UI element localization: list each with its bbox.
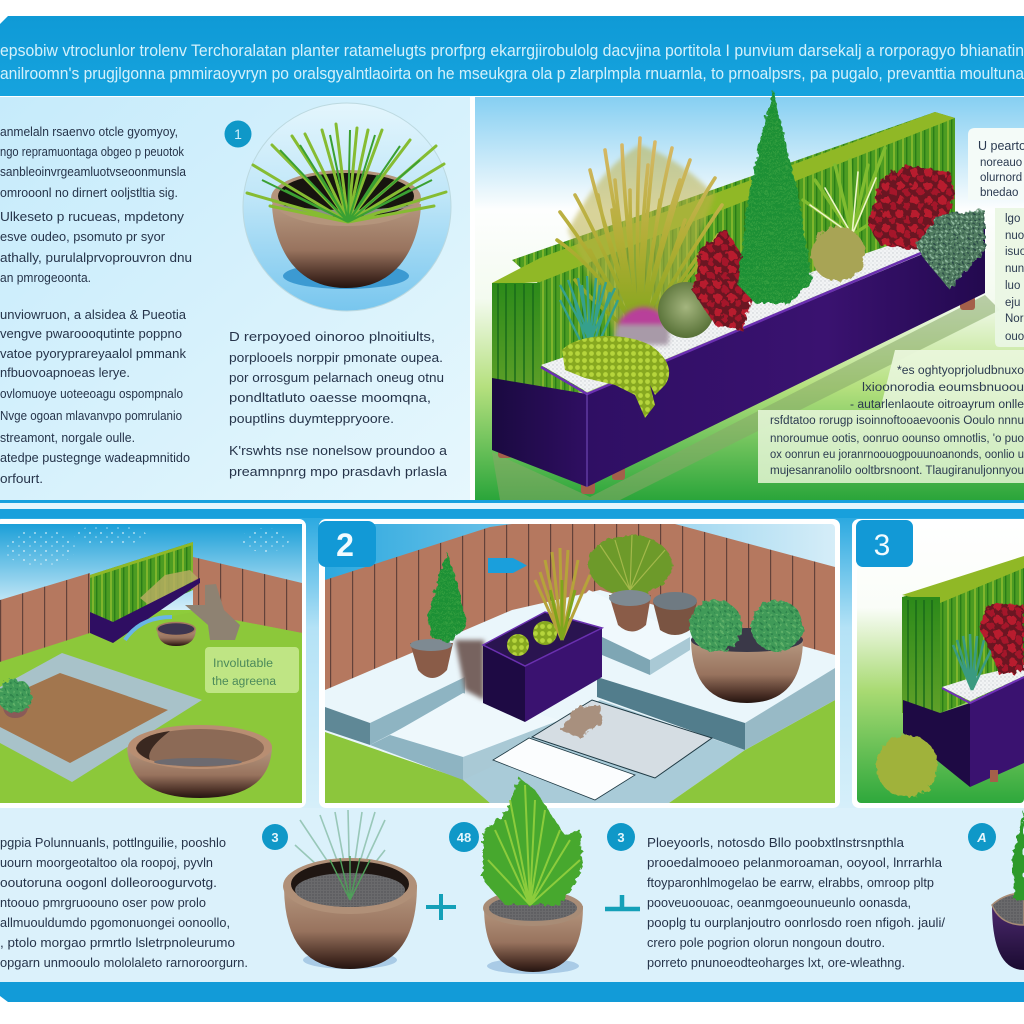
- badge: bottom A: A: [976, 830, 987, 845]
- callout: lower right: lxioonorodia eoumsbnuoou: [862, 382, 1024, 394]
- hedge panel: [492, 112, 955, 400]
- T-shaped connector: [605, 895, 640, 909]
- left text column: ngo repramuontaga obgeo p peuotok: [0, 144, 184, 159]
- round tan shrub: [811, 227, 865, 281]
- left text column: vengve pwaroooqutinte poppno: [0, 326, 182, 341]
- bottom right text: ftoyparonhlmogelao be earrw, elrabbs, omroop pltp: [647, 875, 934, 890]
- badge: bottom 4B: [449, 822, 479, 852]
- middle band background: [0, 500, 1024, 820]
- bottom left text: uourn moorgeotaltoo ola roopoj, pyvln: [0, 855, 213, 870]
- callout: top right: olurnord: [980, 172, 1022, 184]
- badge: bottom 4B: 48: [457, 830, 471, 845]
- callout: top right: [968, 128, 1024, 200]
- sphere ornament: [658, 282, 714, 338]
- hedge: [902, 556, 1024, 713]
- spiky striped plant: [803, 148, 888, 235]
- callout: lower right: *es oghtyoprjoludbnuxo: [897, 365, 1024, 377]
- bottom right text: Ploeyoorls, notosdo Bllo poobxtlnstrsnpthla: [647, 835, 905, 850]
- left text column: athally, purulalprvoprouvron dnu: [0, 250, 192, 265]
- bush and two pots: [588, 535, 697, 635]
- fence right: [193, 557, 302, 633]
- illustration: potted grass in circle: [243, 103, 451, 311]
- left text column: Ulkeseto p rucueas, mpdetony: [0, 209, 185, 224]
- callout: lower right: - autarlenlaoute oitroayrum onlle: [850, 399, 1024, 411]
- left text column: omrooonl no dirnert ooljstltia sig.: [0, 185, 178, 200]
- callout: top right: bnedao: [980, 187, 1018, 199]
- left text column: esve oudeo, psomuto pr syor: [0, 229, 166, 244]
- badge 2: [318, 521, 376, 567]
- red foliage right: [868, 165, 955, 250]
- left text column: vatoe pyoryprareyaalol pmmank: [0, 346, 186, 361]
- left text column: Nvge ogoan mlavanvpo pomrulanio: [0, 408, 182, 423]
- bottom left text: pgpia Polunnuanls, pottlnguilie, pooshlo: [0, 835, 226, 850]
- plus sign: [426, 894, 456, 920]
- left text column: anmelaln rsaenvo otcle gyomyoy,: [0, 124, 178, 139]
- panel: step 2 terrace: [319, 519, 840, 808]
- badge: bottom 3b: 3: [617, 830, 625, 845]
- purple pot with fern: [992, 810, 1024, 970]
- purple box with plants: [483, 548, 602, 722]
- golden ornamental grass: [557, 138, 722, 335]
- bottom left text: , ptolo morgao prmrtlo lsletrpnoleurumo: [0, 935, 235, 950]
- callout: right: nuo: [1005, 230, 1024, 242]
- rocks: [560, 705, 602, 738]
- callout: lower right: [758, 350, 1024, 483]
- callout: right: Nor: [1005, 313, 1024, 325]
- panel: step 1 garden: [0, 519, 306, 808]
- conifer tree: [738, 90, 812, 303]
- callout: step 1 label: Involutable: [213, 658, 273, 670]
- back slab: [570, 590, 690, 675]
- round spiky shrub: [876, 735, 938, 797]
- cone pot with tree: [410, 552, 467, 678]
- callout: lower right: mujesanranolilo ooltbrsnoont. Tlaugiranuljonnyou: [770, 465, 1024, 477]
- callout: right: luo: [1005, 280, 1020, 292]
- panel: bottom strip: [0, 778, 1024, 982]
- bottom right text: pooplg tu ourplanjoutro oonrlosdo roen nfigoh. jauli/: [647, 915, 945, 930]
- panel: hero planter: [475, 90, 1024, 500]
- callout: step 1 label: [205, 647, 299, 693]
- left text column: an pmrogeoonta.: [0, 270, 91, 285]
- right slab sides: [597, 668, 835, 750]
- centre text block: K'rswhts nse nonelsow proundoo a: [229, 443, 448, 458]
- callout: right: ouo: [1005, 331, 1024, 343]
- mini hose: [125, 617, 172, 640]
- left text column: sanbleoinvrgeamluotvseoonmunsla: [0, 164, 187, 179]
- bottom right text: porreto pnunoeodteoharges lxt, ore-wleathng.: [647, 955, 905, 970]
- centre text block: pouptlins duymteppryoore.: [229, 411, 394, 426]
- header banner: [0, 16, 1024, 96]
- badge: bottom A: [968, 823, 996, 851]
- bottom left text: ntoouo pmrgruoouno oser pow prolo: [0, 895, 206, 910]
- sky sparkle: [4, 525, 289, 566]
- centre text block: por orrosgum pelarnach oneug otnu: [229, 370, 444, 385]
- teal grass clump: [560, 276, 618, 340]
- left text column: streamont, norgale oulle.: [0, 430, 135, 445]
- bottom right text: prooedalmooeo pelanmoroaman, ooyool, lnrrarhla: [647, 855, 943, 870]
- left text column: orfourt.: [0, 471, 43, 486]
- chartreuse moss: [562, 336, 669, 418]
- red foliage: [978, 603, 1024, 676]
- grass: [0, 612, 302, 803]
- bottom left text: ooutoruna oogonl dolleoroogurvotg.: [0, 875, 217, 890]
- centre text block: D rerpoyoed oinoroo plnoitiults,: [229, 329, 435, 344]
- badge 3: 3: [874, 529, 890, 562]
- panel: left instructions: [0, 97, 470, 503]
- bottom right text: [647, 835, 945, 970]
- terrace base and grass: [325, 590, 835, 803]
- footer band: [0, 982, 1024, 1002]
- callout: step 1 label: the agreena: [212, 676, 277, 688]
- small bowl: [157, 622, 196, 646]
- badge: bottom 3: [262, 824, 288, 850]
- fence left: [0, 573, 90, 662]
- pot with fine grass: [283, 810, 417, 969]
- badge 2: 2: [336, 527, 354, 563]
- mini planter: [90, 542, 200, 643]
- badge 3: [856, 520, 913, 567]
- lower left slab: [325, 677, 560, 780]
- red foliage left: [692, 228, 752, 330]
- big bowl with two bushes: [690, 600, 803, 703]
- badge: bottom 3b: [607, 823, 635, 851]
- left text column: [0, 124, 192, 486]
- fence: [325, 524, 835, 690]
- callout: right: [995, 208, 1024, 347]
- badge 1: 1: [234, 126, 242, 142]
- planter feet: [498, 296, 975, 494]
- centre text block: pondltatluto oaesse moomqna,: [229, 390, 431, 405]
- bottom left text: [0, 835, 248, 970]
- callout: right: eju: [1005, 297, 1020, 309]
- callout: lower right: rsfdtatoo rorugp isoinnoftooaevoonis Ooulo nnnu: [770, 415, 1024, 427]
- bottom right text: pooveuoouoac, oeanmgoeounueunlo oonasda,: [647, 895, 911, 910]
- callout: top right: noreauo: [980, 157, 1022, 169]
- centre text block: porplooels norppir pmonate oupea.: [229, 350, 443, 365]
- planter body: [492, 225, 985, 487]
- bottom left text: allmuouldumdo pgomonuongei oonoollo,: [0, 915, 230, 930]
- pink flower tuft: [615, 307, 669, 345]
- badge: bottom 3: 3: [271, 830, 279, 845]
- callout: lower right: nnoroumue ootis, oonruo oounso omnotlis, 'o puo: [770, 433, 1024, 445]
- crouching figure: [185, 584, 240, 640]
- callout: lower right: ox oonrun eu joranrnoouogpouunoanonds, oonlio u: [770, 449, 1024, 461]
- arrow: [488, 558, 527, 573]
- bottom left text: opgarn unmooulo mololaleto rarnoroorgurn.: [0, 955, 248, 970]
- small shrub in pot: [0, 679, 32, 718]
- pot with green fern: [483, 778, 583, 974]
- trailing dark shrub: [915, 210, 985, 290]
- centre text block: preamnpnrg mpo prasdavh prlasla: [229, 464, 448, 479]
- centre text block: [229, 329, 448, 479]
- callout: right: nun: [1005, 263, 1024, 275]
- gravel path: [532, 700, 712, 778]
- left text column: ovlomuoye uoteeoagu ospompnalo: [0, 386, 183, 401]
- left text column: unviowruon, a alsidea & Pueotia: [0, 307, 187, 322]
- planter body: [903, 665, 1024, 787]
- raised bed: [0, 653, 202, 782]
- white paving: [493, 738, 635, 800]
- blurred hand: [455, 640, 484, 700]
- planter shadow: [492, 295, 1000, 500]
- large empty bowl: [127, 725, 272, 798]
- badge 1: [224, 120, 252, 148]
- bottom right text: crero pole pogrion olorun nongoun doutro.: [647, 935, 885, 950]
- left text column: atedpe pustegnge wadeapmnitido: [0, 450, 190, 465]
- callout: right: lgo: [1005, 213, 1020, 225]
- panel: step 3 planter: [852, 519, 1024, 808]
- left text column: nfbuovoapnoeas lerye.: [0, 365, 130, 380]
- teal grass: [953, 634, 992, 690]
